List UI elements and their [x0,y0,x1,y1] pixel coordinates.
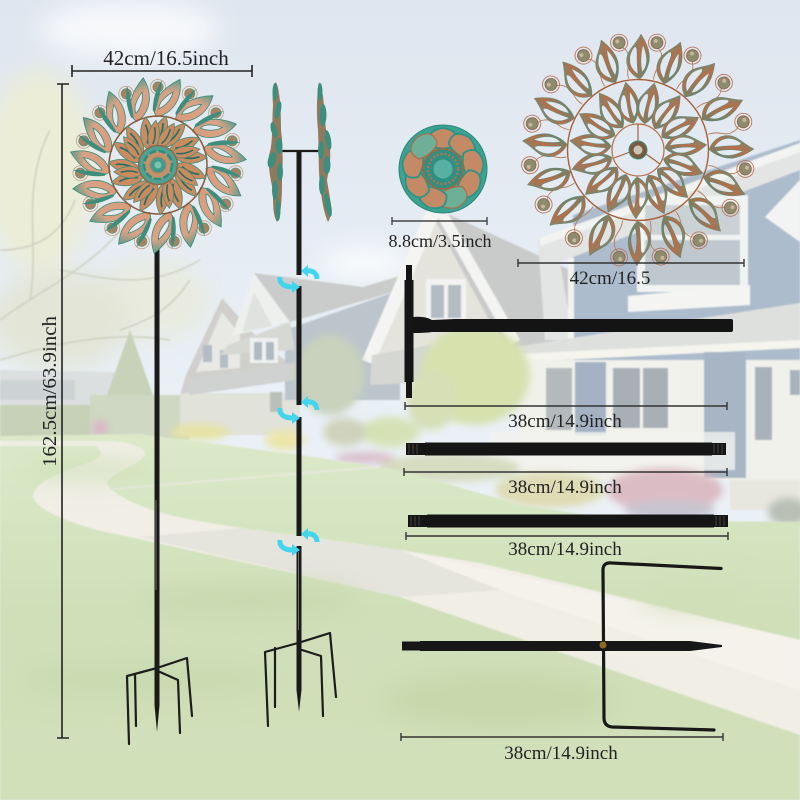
dimension: wheel 42cm/16.5: 42cm/16.5 [570,268,650,289]
distance building and hedge [0,370,115,408]
dimension: overall height 162.5cm/63.9inch [39,84,69,738]
product: assembled wind spinner, front view [70,77,247,744]
icon: cyan rotation arrows, lower joint [280,528,317,556]
side view of right wheel [317,82,333,222]
dimension: T rod 38cm/14.9inch: 38cm/14.9inch [508,411,622,432]
part: forked ground stake [402,563,722,730]
dimension: rod two 38cm/14.9inch [406,532,728,560]
far left house [180,298,290,395]
thin garden path [112,467,380,489]
right blue house [573,140,800,480]
dimension: overall width 42cm/16.5inch: 42cm/16.5inch [103,46,229,70]
dimension: rod one 38cm/14.9inch: 38cm/14.9inch [508,477,622,498]
dimension: stake 38cm/14.9inch [401,733,723,764]
lawn [0,434,800,800]
sidewalk [0,441,800,735]
icon: cyan rotation arrows, top joint [280,265,317,293]
pole and ground stake [127,245,192,744]
side view of left wheel [266,82,283,222]
part: T-shaped top rod [404,265,733,398]
part: spinner wheel with leaves [520,33,755,267]
dimension: stake 38cm/14.9inch: 38cm/14.9inch [504,743,618,764]
dimension: rod two 38cm/14.9inch: 38cm/14.9inch [508,539,622,560]
central gable house [370,207,570,372]
trees and shrubs [92,325,800,526]
pole with gaps at joints [265,151,336,726]
spinner wheel front [70,77,247,254]
dimension: wheel 42cm/16.5 [518,259,744,289]
icon: cyan rotation arrows, middle joint [280,396,317,424]
dimension: medallion 8.8cm/3.5inch: 8.8cm/3.5inch [389,231,491,251]
dimension: T rod 38cm/14.9inch [405,402,727,432]
mid house [285,290,400,400]
dimension: overall height 162.5cm/63.9inch: 162.5cm/63.9inch [39,316,61,467]
part: middle rod 2 [408,514,728,528]
dimension: overall width 42cm/16.5inch [72,46,252,77]
dimension: medallion 8.8cm/3.5inch [389,217,491,251]
part: middle rod 1 [406,442,726,456]
part: centre medallion [399,125,487,213]
dimension: rod one 38cm/14.9inch [404,468,727,498]
bare tree branches [0,130,200,360]
product: assembled wind spinner, side view with screw joints [265,82,336,726]
